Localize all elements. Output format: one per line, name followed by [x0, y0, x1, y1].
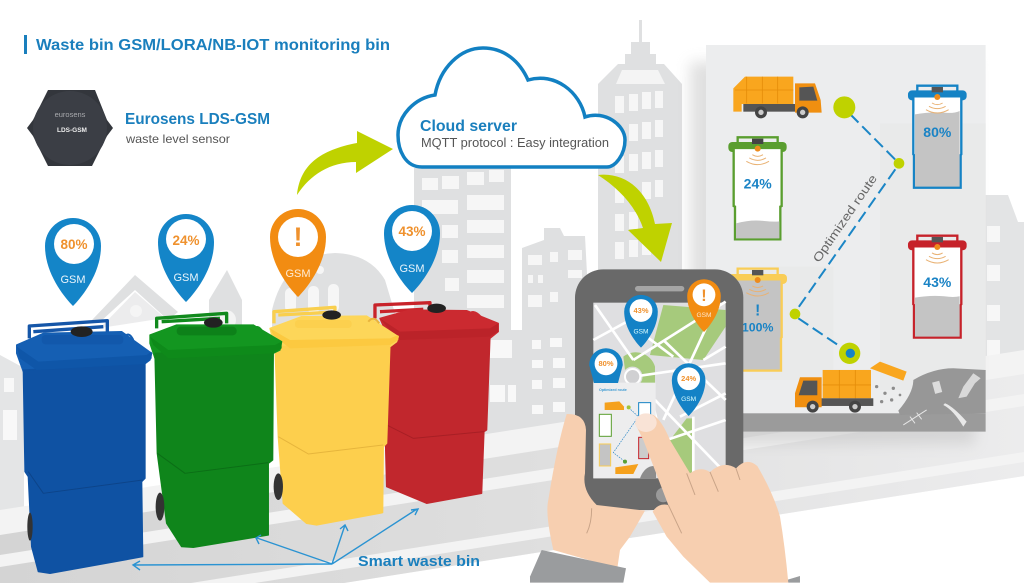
bin: red 43%: 43%	[923, 274, 952, 290]
phone pin: 24%: 24%	[681, 374, 696, 383]
cloud server: Cloud server	[420, 118, 517, 135]
truck top	[733, 77, 822, 118]
pin: 24%: 24%	[172, 233, 200, 248]
left hand	[547, 414, 645, 568]
bin: yellow 100%	[728, 269, 787, 371]
mini app view: Optimized route	[599, 388, 627, 392]
pin: warning: !	[294, 222, 302, 252]
smart waste bin label and arrows	[133, 509, 480, 570]
ground stripes	[0, 350, 1024, 583]
fingernail	[635, 413, 657, 432]
sensor device: eurosens	[55, 110, 86, 119]
phone pin: 24%	[672, 363, 705, 416]
pin: 43%	[384, 205, 440, 293]
bin: green 24%	[728, 137, 787, 239]
sensor heading	[125, 111, 270, 146]
right houses	[985, 195, 1024, 395]
pin: warning: GSM	[285, 268, 311, 280]
truck bottom	[795, 362, 907, 413]
waste pile	[898, 368, 986, 427]
tall tower	[598, 20, 682, 300]
office building left	[414, 168, 511, 368]
pin: 80%: 80%	[60, 237, 88, 252]
home button	[656, 488, 671, 502]
bin: yellow 100%: 100%	[742, 321, 773, 335]
red bin	[375, 303, 498, 503]
phone pin: warning	[687, 279, 721, 332]
pin: 80%: GSM	[60, 274, 86, 286]
smartphone with hands	[530, 269, 800, 583]
mini app view	[593, 383, 656, 478]
phone pin: warning: GSM	[696, 312, 711, 319]
pin: 43%: 43%	[398, 224, 426, 239]
arrow to cloud	[297, 131, 393, 195]
sensor heading: Eurosens LDS-GSM	[125, 111, 270, 128]
bin: yellow 100%: !	[755, 303, 760, 320]
yellow bin	[270, 307, 398, 525]
pin: 24%: GSM	[173, 272, 199, 284]
phone pin: 24%: GSM	[681, 396, 696, 403]
apartment block	[522, 228, 590, 330]
cloud server	[398, 48, 625, 167]
pin: 43%: GSM	[399, 263, 425, 275]
round-top house	[272, 253, 400, 330]
panel: optimized route	[706, 45, 986, 432]
route label: Optimized route	[810, 172, 880, 265]
phone pin: 80%: 80%	[599, 359, 614, 368]
pin: 80%	[45, 218, 101, 306]
right hand	[635, 414, 788, 583]
sensor device	[27, 90, 113, 166]
title: Waste bin GSM/LORA/NB-IOT monitoring bin	[36, 37, 390, 54]
pin: 24%	[158, 214, 214, 302]
phone pin: 43%: GSM	[633, 328, 648, 335]
shirt sleeve	[530, 550, 626, 583]
road	[706, 413, 986, 432]
phone body	[575, 269, 743, 510]
arrow from cloud	[598, 175, 672, 262]
gabled house	[92, 275, 178, 328]
map screen	[593, 302, 726, 478]
smart waste bin label and arrows: Smart waste bin	[358, 553, 480, 570]
sensor heading: waste level sensor	[125, 132, 230, 146]
route line	[790, 96, 904, 364]
clock tower	[209, 270, 242, 340]
sensor device: LDS-GSM	[57, 127, 87, 134]
phone pin: 43%	[624, 295, 658, 348]
phone pin: 80%	[589, 348, 623, 383]
blue bin	[17, 321, 152, 573]
cloud server: MQTT protocol : Easy integration	[421, 136, 609, 150]
bin: green 24%: 24%	[744, 175, 772, 191]
route panel shadow	[690, 62, 975, 444]
bin: red 43%	[908, 236, 967, 338]
bin: blue 80%: 80%	[923, 124, 952, 140]
lower block beside phone	[395, 330, 582, 450]
faint buildings inside panel	[750, 123, 986, 390]
green bin	[150, 313, 282, 547]
phone pin: warning: !	[701, 287, 707, 305]
pin: warning	[270, 209, 326, 297]
right shirt cuff	[787, 576, 800, 583]
bin: blue 80%	[908, 86, 967, 188]
phone pin: 43%: 43%	[633, 306, 649, 315]
far-left houses	[0, 355, 24, 515]
